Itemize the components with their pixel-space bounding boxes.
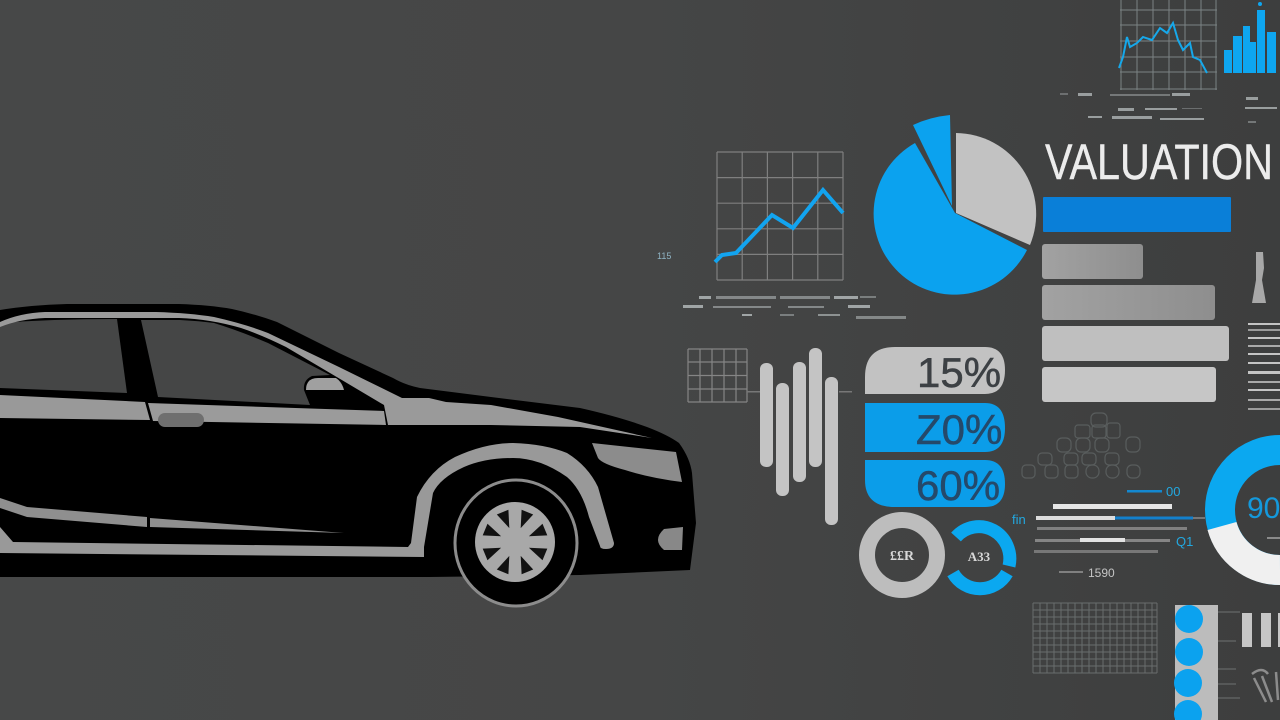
outline pyramid icons (1022, 413, 1140, 478)
pill 60% (865, 460, 1005, 509)
pill 20%: Z0% (916, 406, 1002, 453)
line chart panel (657, 152, 906, 319)
car body silhouette (0, 304, 696, 577)
pill 60%: 60% (916, 462, 1000, 509)
blue ring gauge: A33 (968, 549, 991, 564)
grey bar 2 (1042, 285, 1215, 320)
large donut gauge: 90 (1247, 492, 1280, 525)
headlight (592, 443, 682, 482)
grey ring gauge: ££R (890, 549, 915, 564)
small grey columns (1242, 613, 1280, 647)
horizontal progress lines (1012, 484, 1205, 580)
pill 15%: 15% (917, 349, 1001, 396)
wheel (455, 480, 577, 606)
top chart trend (1119, 23, 1207, 73)
side mirror (306, 378, 344, 390)
line chart grid (717, 152, 843, 280)
lower door strip front (150, 518, 344, 533)
line chart trend (715, 190, 843, 262)
line chart caption (683, 296, 906, 319)
progress label 00: 00 (1166, 484, 1180, 499)
top chart grid (1120, 0, 1217, 90)
rear window (0, 319, 127, 393)
wheel arch and sill trim (0, 443, 614, 557)
grey bar 1 (1042, 244, 1143, 279)
fine grid (1033, 603, 1157, 673)
line chart axis label: 115 (657, 251, 671, 261)
top bar chart (1224, 2, 1276, 73)
vase icon (1252, 252, 1266, 303)
grey ring gauge (867, 520, 937, 590)
blue dots column (1174, 605, 1240, 720)
pill 20% (865, 403, 1005, 453)
top caption text (1060, 93, 1277, 123)
curved icon (1252, 670, 1278, 702)
lower door strip rear (0, 498, 147, 527)
horizontal bars (1042, 197, 1231, 402)
blue bar (1043, 197, 1231, 232)
top line chart (1119, 0, 1217, 90)
front window (141, 320, 330, 405)
roof and hood trim (0, 312, 652, 438)
pie chart (874, 115, 1036, 295)
car illustration (0, 304, 696, 606)
text lines right (1248, 323, 1280, 410)
percentage pills (865, 347, 1005, 509)
progress label 1590: 1590 (1088, 566, 1115, 580)
pie exploded blue slice (913, 115, 952, 206)
fog light (658, 527, 683, 550)
small grid (688, 349, 747, 402)
vertical bars (747, 348, 852, 525)
light bar 4 (1042, 367, 1216, 402)
blue ring gauge (953, 527, 1010, 589)
large donut gauge (1220, 450, 1280, 570)
progress label fin: fin (1012, 512, 1026, 527)
rear belt strip (0, 395, 150, 420)
front belt strip (148, 403, 386, 425)
pill 15% (865, 347, 1005, 396)
pie blue slice (874, 143, 1027, 295)
door handle (158, 413, 204, 427)
light bar 3 (1042, 326, 1229, 361)
pie grey slice (956, 133, 1036, 245)
progress label Q1: Q1 (1176, 534, 1193, 549)
